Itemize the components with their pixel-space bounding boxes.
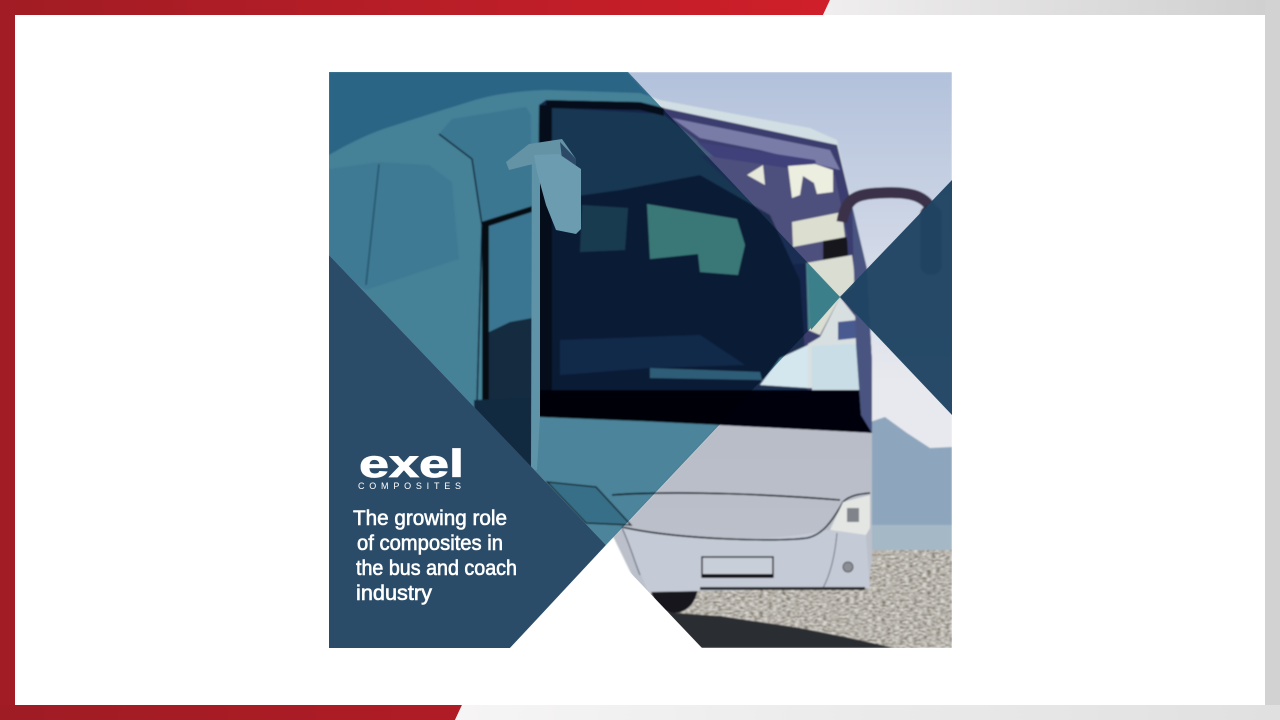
windshield tinted glass	[700, 155, 848, 265]
overlay: navy triangle right	[840, 180, 952, 415]
interior pale patch	[580, 205, 628, 252]
logo wordmark: exel	[359, 443, 464, 486]
left bumper line	[622, 528, 640, 575]
reflection	[760, 345, 808, 388]
reflection	[747, 165, 765, 185]
logo: exel composites	[358, 443, 464, 491]
pale window	[812, 344, 860, 390]
door reflection	[489, 318, 532, 400]
title: the bus and coach	[356, 557, 517, 580]
wheel	[650, 588, 698, 613]
reflection	[788, 164, 833, 198]
overlay: teal translucent diamond	[329, 72, 840, 545]
right mirror arm	[842, 193, 936, 222]
side window	[329, 162, 459, 290]
dark gap under reflection	[823, 237, 848, 260]
overlay: navy panel lower left	[329, 255, 606, 648]
dashboard strip	[650, 368, 762, 380]
right headlight	[830, 495, 870, 535]
pillar beside door	[531, 150, 540, 470]
windshield top frame	[546, 100, 664, 116]
mountain	[870, 416, 952, 526]
lower glass patch	[560, 335, 745, 375]
left mirror	[534, 154, 581, 234]
reflection	[792, 212, 845, 247]
reflection	[806, 255, 856, 335]
frame: top red band	[0, 0, 830, 15]
door lower panel	[474, 398, 532, 470]
windshield top sun strip	[672, 118, 840, 170]
title	[353, 507, 517, 605]
sky	[535, 72, 952, 472]
bus side body	[329, 90, 868, 432]
teal reflection patch	[808, 265, 840, 330]
front body under overlay	[537, 417, 719, 545]
windshield frame left	[537, 105, 552, 417]
right pillar	[852, 205, 872, 433]
fog light	[843, 562, 853, 572]
door outline	[439, 134, 482, 440]
headlight detail	[847, 508, 859, 522]
licence plate	[702, 557, 773, 578]
mirror arm shadow	[560, 142, 576, 185]
sky under overlay	[329, 72, 647, 154]
door lower glass	[489, 212, 532, 331]
left headlight	[547, 482, 631, 525]
front body panel	[537, 417, 872, 592]
overlay: white triangle bottom	[510, 547, 702, 648]
title: of composites in	[357, 532, 503, 555]
windshield bottom band	[537, 390, 872, 433]
door frame post	[482, 226, 489, 404]
blue patch	[838, 320, 857, 340]
frame: bottom grey band	[455, 705, 1280, 720]
windshield	[537, 100, 872, 433]
frame: left red bar	[0, 0, 15, 720]
windshield interior	[548, 175, 808, 395]
lower hood line	[622, 493, 870, 540]
logo subtitle: COMPOSITES	[358, 481, 461, 491]
water	[871, 524, 952, 551]
interior light patch	[647, 204, 745, 275]
door upper window	[439, 107, 532, 222]
windshield middle band	[698, 142, 816, 168]
cobbled ground	[640, 550, 952, 648]
hood line	[612, 493, 840, 500]
bumper seam	[823, 533, 837, 588]
frame: bottom red band	[0, 705, 462, 720]
photo: bus on the shore	[329, 72, 952, 648]
left mirror arm	[506, 139, 576, 185]
right mirror	[920, 205, 942, 275]
frame: top grey band	[823, 0, 1280, 15]
title: industry	[356, 582, 433, 605]
door frame bar	[481, 206, 532, 228]
road shadow	[660, 612, 895, 648]
side window divider	[366, 164, 379, 285]
bus underside	[700, 587, 865, 590]
reflection	[808, 297, 860, 388]
bumper	[622, 528, 870, 592]
upper glass reflection	[552, 108, 754, 206]
frame: right grey bar	[1265, 0, 1280, 720]
title: The growing role	[353, 507, 507, 530]
